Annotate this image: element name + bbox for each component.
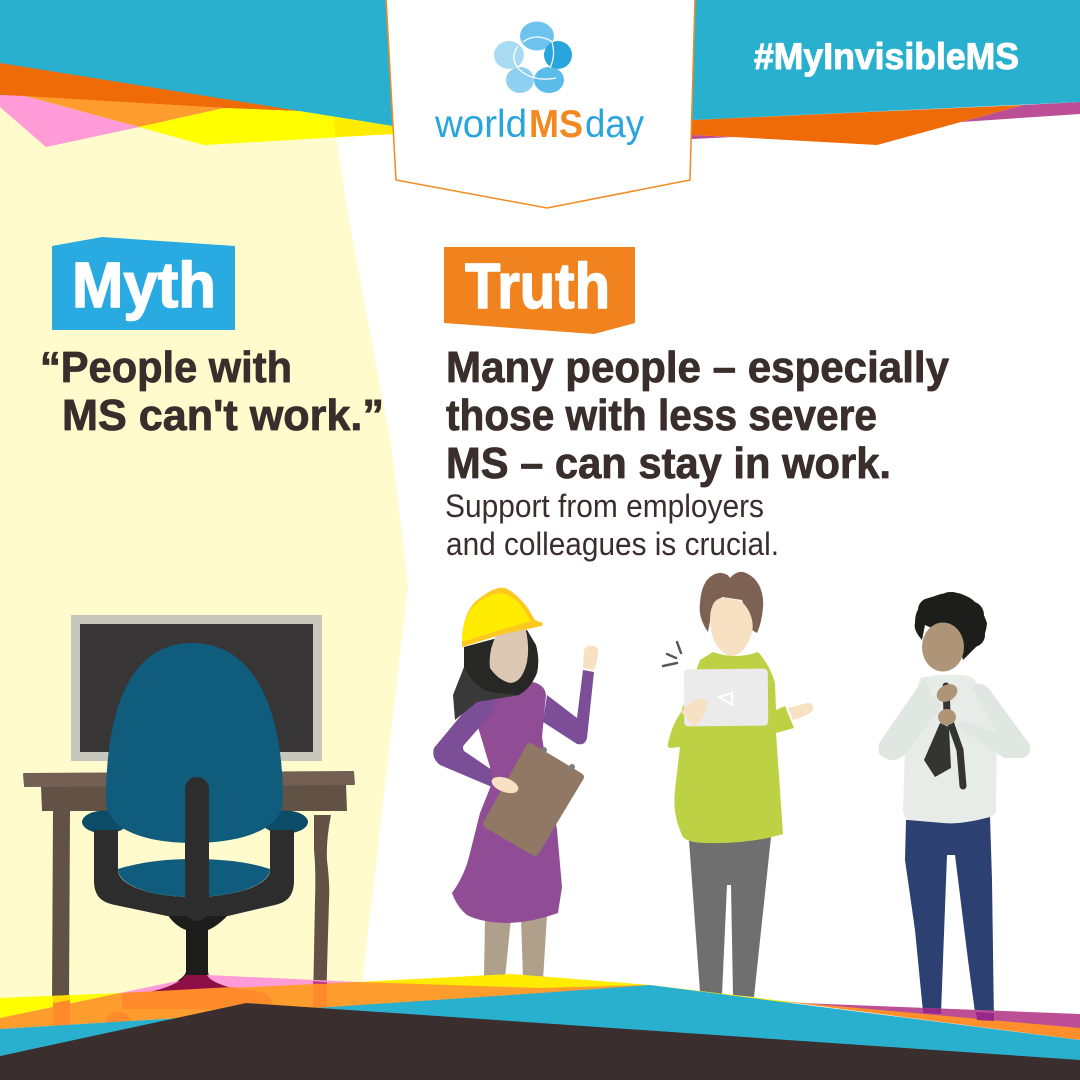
truth heading: MS – can stay in work. [446,439,891,488]
figure: woman with hard hat [433,588,598,980]
truth supporting text: Support from employers [445,488,764,524]
figure: person with tablet [663,572,813,997]
truth heading: those with less severe [446,391,877,440]
panel: logo: MS [529,103,583,146]
truth badge [444,247,635,334]
myth quote [40,343,384,440]
top left colour bands [0,0,393,147]
truth heading: Many people – especially [446,343,949,392]
hijab [453,660,520,720]
myth badge [52,237,235,330]
floor colour bands [0,974,1080,1080]
top right colour bands [692,0,1080,145]
figure: person tying a tie [878,592,1030,1022]
logo wordmark: world [434,103,527,146]
myth quote: “People with [40,343,292,392]
truth supporting text: and colleagues is crucial. [446,526,779,562]
icon: world MS day flower [494,22,572,93]
truth badge: Truth [465,250,610,322]
panel: logo [386,0,695,208]
myth quote: MS can't work.” [62,391,384,440]
truth heading [446,343,949,488]
panel: myth background [0,90,408,1005]
desk [24,772,354,1005]
truth supporting text [445,488,779,562]
office chair [82,643,308,992]
monitor [71,615,322,761]
hashtag: #MyInvisibleMS [754,36,1019,77]
myth badge: Myth [72,249,216,321]
panel: logo: day [585,103,644,146]
